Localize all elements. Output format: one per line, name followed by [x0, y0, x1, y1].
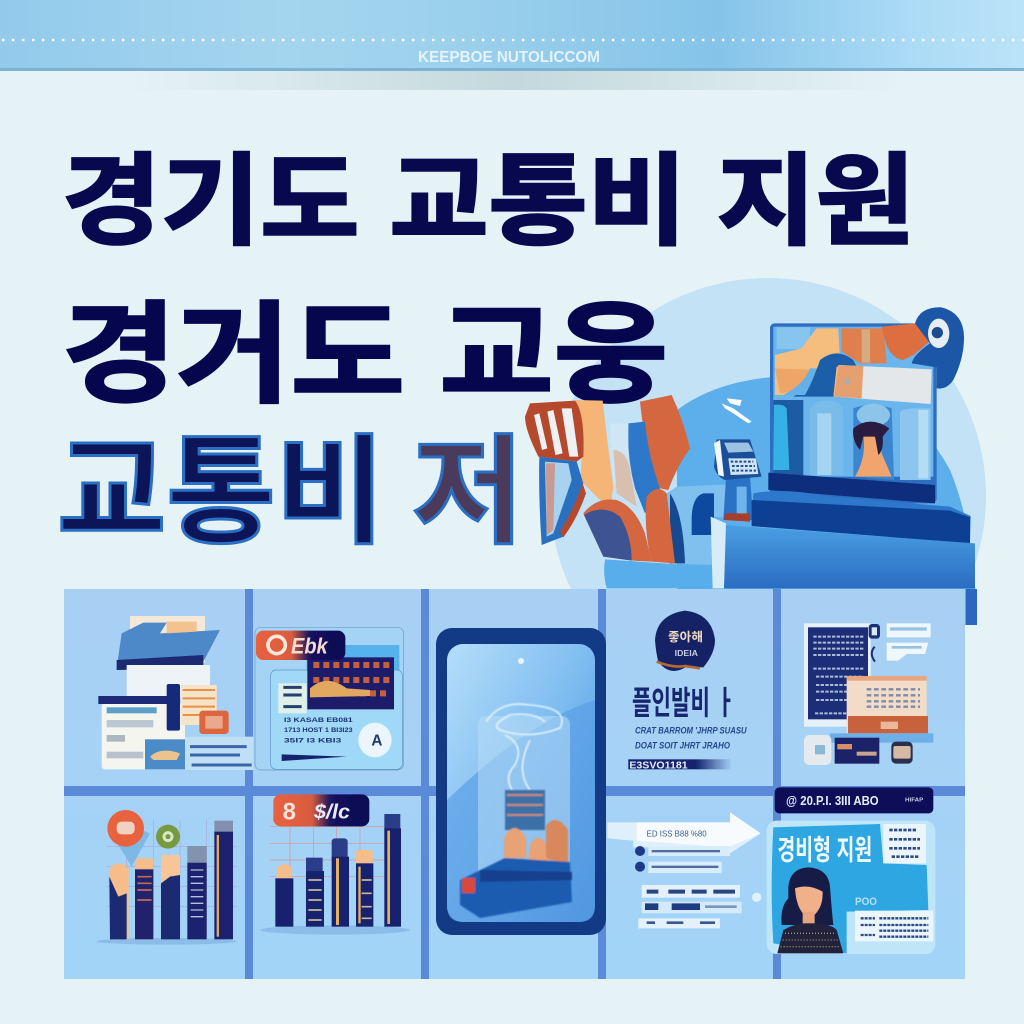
- orange seat right: [640, 395, 690, 490]
- panel: ticket card: Ebk: [291, 633, 329, 658]
- panel: badge and heading: E3SVO1181: [629, 760, 688, 771]
- grid background: [64, 589, 965, 979]
- small white plane mark: [722, 398, 752, 423]
- panel: arrow and list: [607, 812, 761, 928]
- arrow: [607, 812, 761, 853]
- speech markers: [118, 830, 150, 867]
- dark banner: [775, 787, 933, 813]
- person: [777, 867, 843, 953]
- panel: document and calendar: [804, 623, 933, 765]
- panel: ticket card: I3 KASAB EB081: [284, 717, 353, 724]
- mid dark seat: [628, 422, 660, 513]
- smoke swirl: [486, 704, 562, 800]
- panel: promo card with person: HIFAP: [905, 798, 924, 804]
- cream headrest: [575, 400, 613, 510]
- box front: [724, 525, 975, 588]
- left striped seat: [525, 401, 584, 462]
- dark interior and small door shapes: [667, 483, 753, 565]
- phone screen: [447, 644, 595, 922]
- panel: documents: [98, 616, 253, 770]
- panel grid: [64, 589, 965, 979]
- right side stripe: [966, 589, 977, 625]
- round badge: 좋아해: [668, 630, 703, 644]
- panel: promo card with person: @ 20.P.I. 3III ABO: [786, 793, 879, 808]
- panel: promo card with person: POO: [855, 896, 877, 908]
- title line 2: 경거도 교웅: [62, 294, 668, 417]
- heading: 플인발비 ㅏ: [632, 684, 735, 721]
- tag: [273, 794, 369, 826]
- ticket machine: [714, 439, 762, 480]
- small devices: [804, 735, 831, 765]
- title line 3 outlined: 저: [412, 427, 524, 559]
- panel: badge and heading: [628, 611, 747, 771]
- monitor: white placard: [834, 365, 932, 404]
- card headline: 경비형 지원: [777, 834, 872, 865]
- header band: [0, 0, 1024, 90]
- monitor: door columns: [773, 400, 803, 475]
- camera on monitor corner: [882, 323, 929, 360]
- title line 1: 경기도 교통비 지원: [62, 146, 915, 258]
- panel: bar chart 2: 8: [283, 798, 296, 825]
- desk slab: [752, 491, 971, 543]
- monitor: keyboard base: [768, 473, 935, 503]
- card: [767, 821, 935, 954]
- grid lines: [64, 589, 965, 979]
- panel: badge and heading: DOAT SOIT JHRT JRAHO: [635, 740, 730, 750]
- panel: bar chart 1: [97, 810, 237, 945]
- panel: ticket card: 1713 HOST 1 BI3I23: [284, 727, 353, 734]
- monitor: top band: [777, 327, 810, 349]
- orange bottom seat: [583, 499, 652, 562]
- monitor: person: [855, 435, 892, 477]
- transit model: [460, 790, 572, 918]
- round badge: [655, 611, 715, 671]
- laptop monitor frame: [770, 323, 937, 503]
- panel: ticket card: A: [371, 732, 382, 749]
- hero transit scene: [525, 307, 975, 588]
- note bottom right: [855, 911, 933, 941]
- title line 3 outlined: 교통비: [57, 427, 385, 559]
- round badge: IDEIA: [675, 649, 698, 658]
- panel: promo card with person: [767, 787, 935, 954]
- title line 3 outlined: [57, 427, 524, 559]
- lower left blue box: [604, 559, 712, 588]
- header band: KEEPBOE NUTOLICCOM: [418, 49, 600, 66]
- panel: ticket card: [255, 627, 404, 770]
- hero background circles: [550, 278, 986, 714]
- panel: badge and heading: CRAT BARROM 'JHRP SUASU: [635, 725, 747, 735]
- list rows: [635, 846, 645, 856]
- tag: [256, 631, 345, 660]
- panel: bar chart 2: $/lc: [313, 801, 351, 824]
- note top right: [883, 824, 926, 863]
- phone body: [436, 628, 606, 935]
- panel: ticket card: 35I7 I3 KBI3: [284, 738, 342, 745]
- arrow: ED ISS B88 %80: [647, 829, 707, 839]
- translucent tower: [478, 716, 570, 886]
- panel: bar chart 2: [260, 794, 410, 935]
- panel: phone: [436, 628, 606, 935]
